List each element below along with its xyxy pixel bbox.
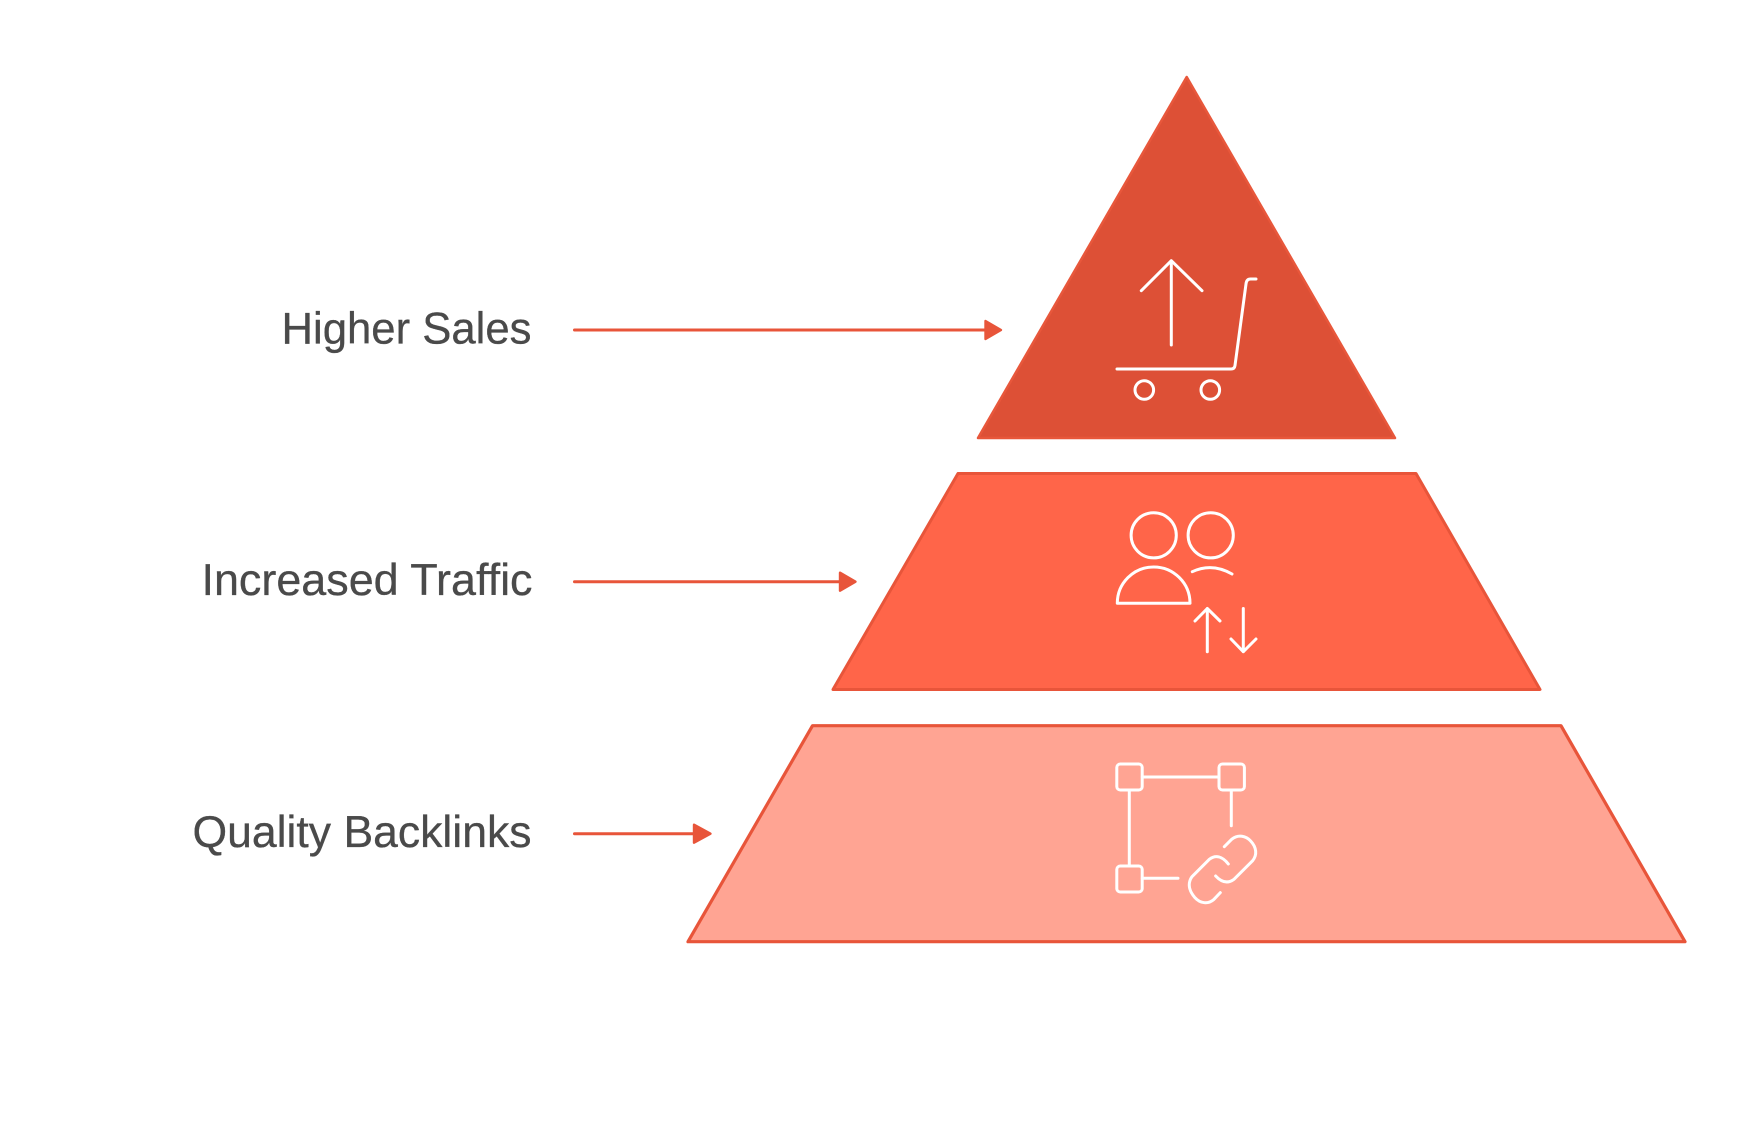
arrow: Quality Backlinks to bottom tier bbox=[574, 825, 710, 843]
arrow: Higher Sales to top tier bbox=[574, 321, 1001, 339]
icon: network nodes with chain link bbox=[1117, 764, 1256, 903]
pyramid tier: top triangle bbox=[978, 77, 1395, 438]
icon: shopping cart with up arrow bbox=[1117, 261, 1256, 399]
pyramid tier: middle trapezoid bbox=[833, 474, 1540, 690]
icon: users with up and down arrows bbox=[1117, 513, 1256, 652]
arrow: Increased Traffic to middle tier bbox=[574, 573, 856, 591]
label: Increased Traffic: Increased Traffic bbox=[202, 556, 532, 605]
pyramid tier: bottom trapezoid bbox=[688, 726, 1685, 942]
label: Quality Backlinks: Quality Backlinks bbox=[192, 808, 532, 857]
label: Higher Sales: Higher Sales bbox=[282, 304, 532, 354]
